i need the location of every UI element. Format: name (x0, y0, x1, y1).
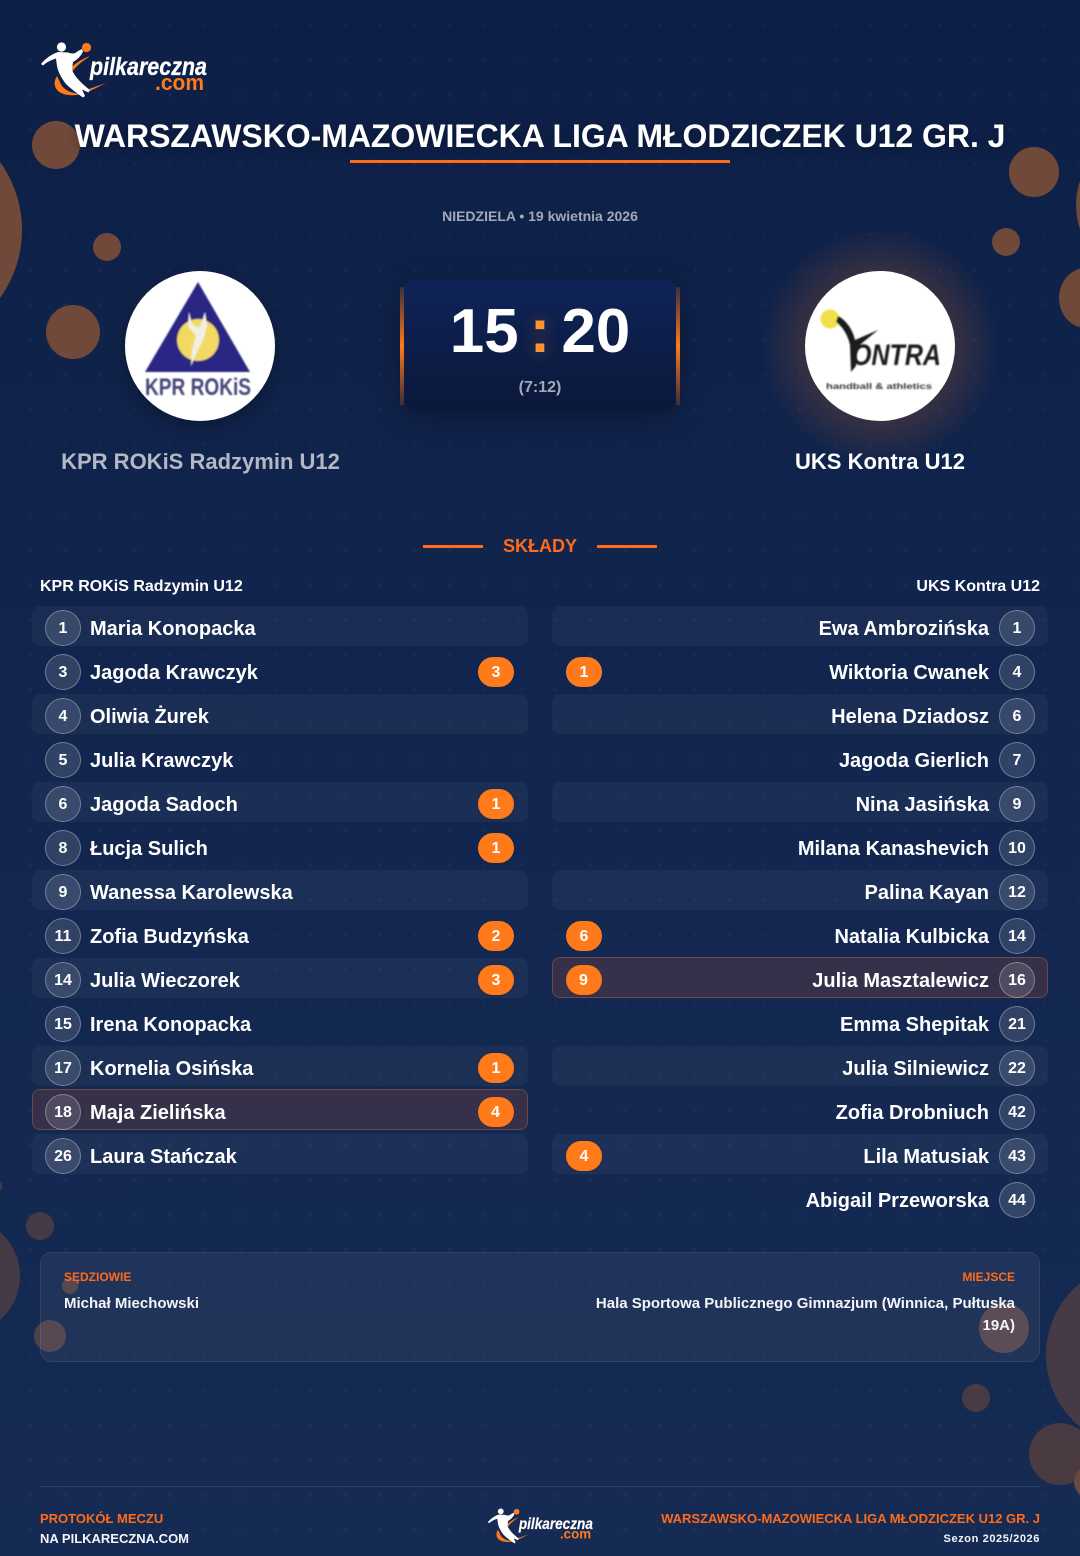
away lineup: 44 (1008, 1192, 1026, 1209)
home lineup: 11 (55, 928, 71, 945)
home lineup: 1 (492, 840, 500, 857)
score background (403, 280, 677, 410)
footer site name: NA PILKARECZNA.COM (40, 1531, 189, 1546)
home lineup: 18 (54, 1104, 72, 1120)
away lineup: Palina Kayan (864, 882, 989, 904)
home lineup: Maja Zielińska (90, 1102, 226, 1124)
home lineup: 4 (59, 708, 67, 725)
home lineup: 3 (59, 664, 67, 681)
home lineup: Wanessa Karolewska (90, 882, 293, 904)
footer divider (40, 1486, 1040, 1487)
away lineup: 9 (579, 972, 588, 988)
score panel (396, 279, 684, 424)
home lineup: Zofia Budzyńska (90, 926, 249, 948)
heading line right (597, 545, 657, 548)
away team logo (770, 236, 990, 456)
footer league name: WARSZAWSKO-MAZOWIECKA LIGA MŁODZICZEK U12 GR. J (661, 1511, 1040, 1526)
away team logo: handball & athletics (826, 381, 932, 391)
title underline (350, 160, 730, 163)
away team name: UKS Kontra U12 (795, 449, 965, 474)
away lineup: 6 (580, 928, 588, 945)
away lineup: 6 (1013, 708, 1021, 725)
heading text: SKŁADY (503, 536, 577, 556)
home lineup: Jagoda Krawczyk (90, 662, 258, 684)
home lineup heading: KPR ROKiS Radzymin U12 (40, 578, 243, 595)
home lineup: Irena Konopacka (90, 1014, 251, 1036)
footer protocol label: PROTOKÓŁ MECZU (40, 1511, 163, 1526)
home lineup: Oliwia Żurek (90, 706, 209, 728)
away lineup: Nina Jasińska (856, 794, 989, 816)
away lineup: Wiktoria Cwanek (829, 662, 989, 684)
away lineup: Julia Silniewicz (842, 1058, 989, 1080)
home lineup: 4 (491, 1104, 500, 1120)
home lineup: 1 (492, 1060, 500, 1077)
home lineup: 8 (59, 840, 67, 857)
away lineup: Natalia Kulbicka (834, 926, 989, 948)
home lineup: Łucja Sulich (90, 838, 208, 860)
home lineup: Julia Wieczorek (90, 970, 240, 992)
title: WARSZAWSKO-MAZOWIECKA LIGA MŁODZICZEK U12 GR. J (75, 118, 1005, 154)
away lineup: 21 (1008, 1016, 1026, 1033)
right accent bar (676, 287, 680, 405)
away lineup: 4 (580, 1148, 588, 1165)
home lineup: Kornelia Osińska (90, 1058, 253, 1080)
home lineup: 2 (492, 928, 500, 945)
home team logo: KPR ROKiS (145, 374, 251, 401)
home lineup: 5 (59, 752, 67, 769)
away lineup: Helena Dziadosz (831, 706, 989, 728)
home lineup: 14 (54, 972, 72, 989)
venue text: Hala Sportowa Publicznego Gimnazjum (Winnica, Pułtuska 19A) (596, 1295, 1015, 1334)
away lineup (552, 606, 1048, 1218)
home lineup: Laura Stańczak (90, 1146, 237, 1168)
score: 15:20 (450, 297, 630, 366)
away lineup: 9 (1013, 796, 1021, 813)
away lineup: 4 (1013, 664, 1021, 681)
home lineup: Julia Krawczyk (90, 750, 233, 772)
referees label: SĘDZIOWIE (64, 1270, 131, 1284)
panel: match details (40, 1252, 1040, 1362)
home team logo (122, 271, 278, 430)
venue label: MIEJSCE (962, 1270, 1015, 1284)
away lineup: 16 (1008, 972, 1026, 988)
footer left text (40, 1511, 189, 1546)
away lineup: 14 (1008, 928, 1026, 945)
away lineup: Abigail Przeworska (806, 1190, 989, 1212)
away lineup: Zofia Drobniuch (836, 1102, 989, 1124)
away lineup: 10 (1008, 840, 1026, 857)
away lineup: Jagoda Gierlich (839, 750, 989, 772)
away lineup: 12 (1008, 884, 1026, 901)
away lineup: Lila Matusiak (863, 1146, 989, 1168)
footer logo (488, 1508, 593, 1544)
home lineup: Jagoda Sadoch (90, 794, 238, 816)
home lineup: 26 (54, 1148, 72, 1165)
away lineup: 42 (1008, 1104, 1026, 1121)
away lineup: 43 (1008, 1148, 1026, 1165)
away lineup: 7 (1013, 752, 1021, 769)
home lineup: Maria Konopacka (90, 618, 256, 640)
logo: pilkareczna.com (41, 42, 207, 98)
home lineup: 9 (59, 884, 67, 901)
away team logo: ONTRA (852, 339, 941, 372)
footer right text (661, 1511, 1040, 1545)
logo: pilkareczna.com: .com (155, 70, 204, 95)
home lineup: 17 (54, 1060, 72, 1077)
match date: NIEDZIELA • 19 kwietnia 2026 (442, 208, 638, 224)
home lineup: 1 (59, 620, 67, 637)
home team name: KPR ROKiS Radzymin U12 (61, 449, 340, 474)
away lineup: Emma Shepitak (840, 1014, 989, 1036)
away lineup: 1 (580, 664, 588, 681)
section heading: lineups (423, 536, 657, 556)
away lineup heading: UKS Kontra U12 (916, 578, 1040, 595)
footer logo: .com (560, 1526, 591, 1542)
away lineup: Julia Masztalewicz (812, 970, 989, 992)
home lineup (32, 606, 528, 1174)
half-time score: (7:12) (519, 379, 561, 396)
footer season: Sezon 2025/2026 (944, 1533, 1040, 1545)
home lineup: 6 (59, 796, 67, 813)
home lineup: 3 (492, 972, 500, 989)
home lineup: 1 (492, 796, 500, 813)
away lineup: 1 (1013, 620, 1021, 637)
referee name: Michał Miechowski (64, 1295, 199, 1312)
away lineup: 22 (1008, 1060, 1026, 1077)
heading line left (423, 545, 483, 548)
away lineup: Ewa Ambrozińska (819, 618, 989, 640)
away lineup: Milana Kanashevich (798, 838, 989, 860)
home lineup: 3 (492, 664, 500, 681)
home lineup: 15 (54, 1016, 72, 1033)
left accent bar (400, 287, 404, 405)
